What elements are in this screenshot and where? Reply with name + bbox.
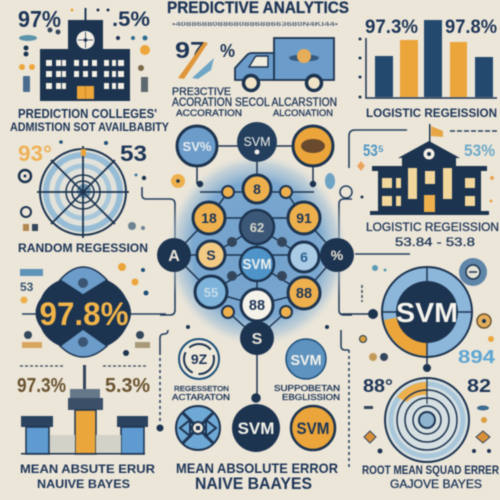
caption: RANDOM REGESSION [18,241,148,255]
icon: school building [40,8,130,101]
panel: college admission building: ADMISTION SOT AVAILBABITY [10,122,169,134]
donut chart [382,267,472,357]
decorative icons around building [19,8,150,92]
node: dark SVM: SVM [238,419,274,438]
caption: LOGISTIC REGEISSION [366,106,497,120]
panel: logistic regression building: 53% [464,141,495,160]
subtitle strip: •408868808868088688663680N4KI44• [172,22,338,28]
panel: 97.8% badge and podium [17,263,155,491]
caption: MEAN ABSOLUTE ERROR [176,460,338,476]
percent with swoosh: % [220,41,235,61]
middle nodes: 55 [204,285,218,300]
node: cream gauge: 9Z [191,351,208,367]
node: cross icon [176,406,220,450]
values: 97.3% [17,375,66,397]
decorations: 53 [20,280,34,294]
radar chart [37,146,129,238]
panel: logistic regression building: 53.84 - 53.8 [395,235,475,249]
middle nodes: A [168,248,180,265]
panel: 97.8% badge and podium: 5.3% [105,375,150,397]
panel: truck predictive: ACORATION SECOL ALCARSTION [172,97,337,109]
captions: REGESSETON [174,384,229,393]
values: 53⁵ [363,141,384,160]
top nodes [177,122,333,166]
node: orange SVM: SVM [296,420,330,438]
podium chart [21,365,148,454]
small decorations [357,161,365,171]
side icons [364,406,491,454]
panel: bar chart logistic regression: 97.8% [445,17,497,38]
middle nodes: 88 [296,286,312,302]
middle nodes: SVM [242,257,272,273]
node: cream gauge [179,339,219,379]
donut chart: SVM [396,297,458,328]
blue glow [165,152,349,348]
side icons [19,140,146,231]
middle nodes [157,175,354,355]
values: 88° [363,376,393,396]
radar chart [385,378,469,462]
connector lines [22,130,497,470]
left dashed line end node [156,424,164,432]
decorations [360,265,494,361]
panel: bottom center nodes: ACTARATON [172,392,230,402]
top nodes: SV% [183,139,212,154]
values: 93° [18,141,52,166]
panel: root mean squared error radar: GAJOVE BAYES [390,477,482,491]
middle nodes: 6 [300,249,308,265]
panel: truck predictive: ACCORATION [176,108,242,119]
panel: bottom center nodes: SUPPOBETAN [274,384,340,393]
caption: LOGISTIC REGEISSION [366,220,499,234]
percent right: .5% [112,8,150,31]
middle nodes: 18 [201,210,217,226]
badge [459,258,487,286]
badge: 97.8% [40,296,128,332]
panel: central SVM network [157,122,354,402]
percent with swoosh: 97 [175,37,205,63]
panel: bottom center nodes: NAIVE BAAYES [195,475,312,493]
panel: SVM donut [342,258,495,372]
outlying dots [171,173,335,329]
panel: truck predictive [172,37,337,119]
icon: delivery truck [235,38,334,90]
caption: PRE3CTIVE [172,86,231,98]
panel: college admission building [10,6,169,134]
panel: root mean squared error radar: 82 [467,376,491,396]
node: blue SVM [286,339,326,379]
top nodes: SVM [243,135,271,149]
panel: random regression radar: 53 [120,141,147,166]
panel: bottom center nodes [172,339,340,493]
middle nodes: 8 [253,181,261,197]
network links [174,142,337,402]
middle nodes: 91 [296,210,312,226]
middle nodes: % [331,247,344,263]
value labels: 97.3% [365,17,418,38]
panel: truck predictive: ALCONATION [273,108,333,119]
panel: bar chart logistic regression [358,17,497,120]
value: 894 [458,347,495,367]
badge [36,267,131,357]
panel: logistic regression building [340,124,499,249]
middle nodes: S [206,247,216,263]
panel: 97.8% badge and podium: NAUIVE BAYES [37,477,130,491]
bar chart [358,20,497,98]
middle nodes: 88 [249,298,265,314]
percent left: 97% [18,6,61,32]
node connectors [342,309,431,372]
icon: courthouse building [370,124,489,215]
panel: root mean squared error radar [362,376,499,491]
decorations [20,263,150,366]
panel: bottom center nodes: EBGLISSION [282,392,340,402]
percent with swoosh [175,37,235,79]
node: blue SVM: SVM [290,352,322,369]
caption: MEAN ABSUTE ERUR [20,462,155,476]
panel: random regression radar [18,140,148,255]
node: orange SVM [291,406,335,450]
node: dark SVM [232,404,280,452]
middle nodes: S [252,331,263,348]
caption: PREDICTION COLLEGES' [18,107,157,121]
middle nodes: 62 [250,220,264,235]
